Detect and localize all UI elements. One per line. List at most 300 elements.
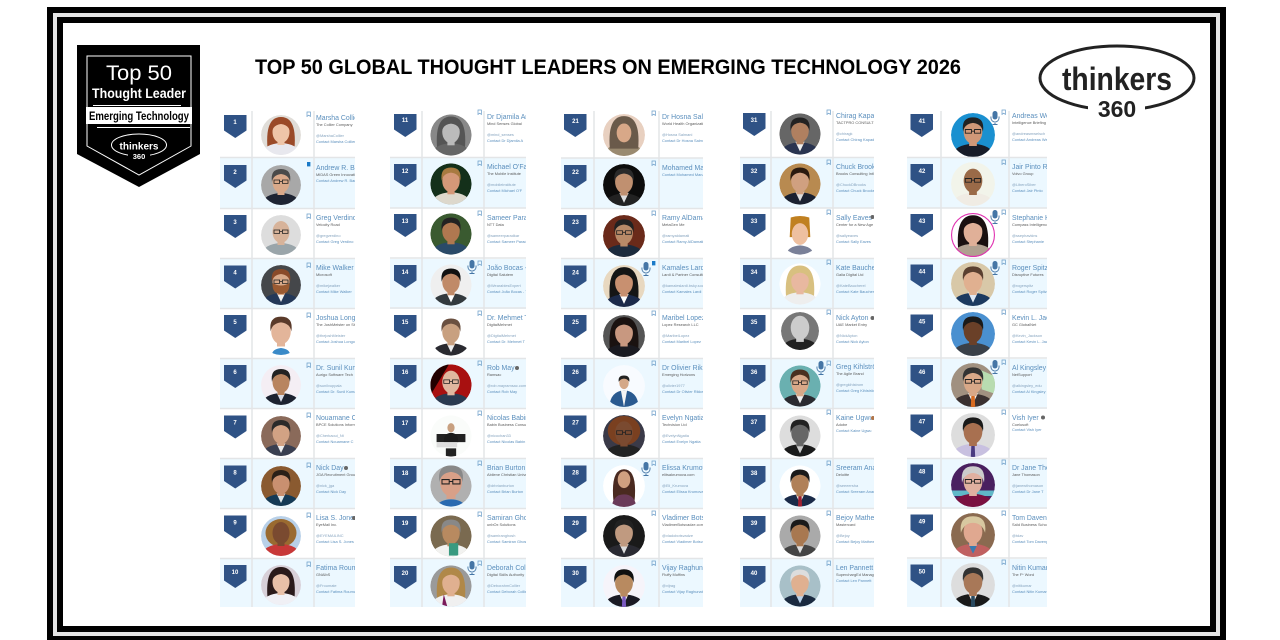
row 14 — [390, 259, 541, 309]
details 36 — [836, 364, 882, 393]
row 26 — [561, 359, 714, 409]
details 1: Contact Marsha Collier — [316, 139, 356, 144]
portrait 7 — [261, 416, 301, 458]
badge: Top 50 Thought Leader Emerging Technology: Top 50 — [106, 62, 172, 85]
details 48: Contact Dr Jane T — [1012, 489, 1044, 494]
row 24: 24 — [572, 270, 579, 276]
details 17: @nicochan33 — [487, 433, 511, 438]
details 6: Dr. Sunil Kumar — [316, 365, 365, 372]
row 8: 8 — [233, 470, 237, 476]
details 41 — [1012, 113, 1062, 142]
row 37 — [743, 410, 875, 459]
portrait 12 — [430, 163, 472, 207]
details 7: BPCE Solutions Informatiques — [316, 422, 368, 427]
details 9: Lisa S. Jones — [316, 515, 358, 522]
details 26: Dr Olivier Rikken — [662, 365, 714, 372]
portrait 20 — [430, 565, 472, 609]
details 18: Brian Burton — [487, 465, 525, 472]
details 42: @LiberoSiber — [1012, 182, 1037, 187]
details 4 — [316, 265, 354, 294]
details 41: Contact Andreas Welsch — [1012, 137, 1055, 142]
details 16: Contact Rob May — [487, 389, 517, 394]
details 36: The Agile Brand — [836, 371, 864, 376]
row 6 — [220, 359, 365, 409]
details 44: @rogerspitz — [1012, 283, 1033, 288]
details 13 — [487, 215, 542, 244]
row 16: 16 — [402, 370, 409, 376]
details 16 — [487, 365, 526, 394]
row 39: 39 — [751, 521, 758, 527]
portrait 27 — [603, 415, 645, 459]
portrait 48 — [951, 463, 995, 509]
portrait 32 — [779, 163, 821, 207]
details 1: The Collier Company — [316, 122, 353, 127]
details 46 — [1012, 365, 1047, 394]
details 47 — [1012, 415, 1045, 432]
details 45: Contact Kevin L. Jackson — [1012, 339, 1056, 344]
portrait 49 — [951, 513, 995, 559]
row 44 — [907, 259, 1049, 309]
details 12 — [487, 164, 526, 192]
row 31 — [743, 110, 884, 157]
details 35: Nick Ayton — [836, 315, 869, 322]
portrait 1 — [261, 115, 301, 157]
details 46: @alkingsley_edu — [1012, 383, 1042, 388]
details 40 — [836, 565, 886, 583]
details 9: EyeMail Inc. — [316, 522, 337, 527]
logo: thinkers 360: thinkers — [1062, 61, 1172, 97]
portrait 22 — [603, 164, 645, 208]
details 11: Dr Djamila Amimer — [487, 114, 545, 121]
row 17 — [394, 411, 533, 457]
row 50 — [907, 559, 1049, 609]
panel: ranks 1-10 — [220, 111, 355, 607]
row 36 — [740, 359, 882, 409]
row 47: 47 — [919, 420, 926, 426]
row 20: 20 — [402, 571, 409, 577]
details 42: Contact Jair Pinto — [1012, 188, 1043, 193]
details 27: Evelyn Ngatia — [662, 415, 705, 422]
row 13 — [394, 210, 526, 255]
details 23: @ramyaldamati — [662, 233, 689, 238]
details 20: Deborah Collier — [487, 565, 536, 572]
panel: ranks 21-30 — [561, 111, 723, 609]
row 49: 49 — [919, 520, 926, 526]
portrait 41 — [951, 113, 995, 159]
portrait 3 — [261, 215, 301, 257]
details 30: Vijay Raghunathan — [662, 565, 720, 572]
row 21: 21 — [572, 119, 579, 125]
row 44: 44 — [919, 270, 926, 276]
details 21: @Hosna Salmani — [662, 132, 692, 137]
row 12 — [390, 158, 539, 208]
details 25: Lopez Research LLC — [662, 322, 699, 327]
details 28 — [662, 465, 710, 494]
details 42 — [1012, 164, 1065, 193]
portrait 29 — [603, 515, 645, 559]
details 39 — [836, 515, 879, 544]
row 23 — [564, 211, 710, 259]
details 17: Nicolas Babin — [487, 415, 529, 422]
badge: Top 50 Thought Leader Emerging Technology: thinkers — [120, 140, 159, 152]
details 46: Contact Al Kingsley — [1012, 389, 1046, 394]
details 16: @rob.mayramsac.com — [487, 383, 526, 388]
row 5 — [224, 313, 360, 355]
details 34: Contact Kate Baucherel — [836, 289, 877, 294]
row 3: 3 — [233, 220, 237, 226]
details 50 — [1012, 565, 1049, 594]
details 39: @Bejoy — [836, 533, 850, 538]
details 41: Intelligence Briefing — [1012, 120, 1046, 125]
details 38: Contact Sreeram Anantha — [836, 489, 882, 494]
details 20 — [487, 565, 536, 594]
portrait 30 — [603, 565, 645, 609]
details 7 — [316, 415, 355, 443]
details 18: Abilene Christian University — [487, 472, 535, 477]
row 46: 46 — [919, 370, 926, 376]
row 15: 15 — [402, 320, 409, 326]
portrait 35 — [781, 312, 819, 352]
row 23: 23 — [572, 220, 579, 226]
row 49 — [910, 511, 1059, 559]
row 30 — [561, 559, 720, 609]
details 12: Michael O'Farrell — [487, 164, 539, 171]
details 13: Sameer Paradkar — [487, 215, 542, 222]
badge: Top 50 Thought Leader Emerging Technology: Emerging Technology — [89, 111, 189, 123]
details 8: Nick Day — [316, 465, 344, 472]
details 42: Jair Pinto Ribeiro — [1012, 164, 1065, 171]
details 2: Andrew R. Bauer — [316, 165, 369, 172]
details 34: Kate Baucherel — [836, 265, 884, 272]
details 45: Kevin L. Jackson — [1012, 315, 1064, 322]
portrait 5 — [270, 316, 292, 355]
details 17 — [487, 415, 533, 444]
details 46: NetSupport — [1012, 372, 1033, 377]
details 22 — [662, 165, 714, 177]
details 32: Contact Chuck Brooks — [836, 188, 875, 193]
details 49: Contact Tom Davenport — [1012, 539, 1054, 544]
portrait 37 — [779, 415, 821, 459]
details 28: elitsakrumova.com — [662, 472, 694, 477]
portrait 18 — [430, 465, 472, 509]
details 33: @sallyeaves — [836, 233, 858, 238]
details 47: Vish Iyer — [1012, 415, 1039, 422]
badge: Top 50 Thought Leader Emerging Technology — [77, 45, 200, 187]
details 2: Contact Andrew R. Bauer — [316, 178, 361, 183]
details 11: Contact Dr Djamila A — [487, 138, 524, 143]
details 3: Velocity Road — [316, 222, 340, 227]
title: TOP 50 GLOBAL THOUGHT LEADERS ON EMERGING TECHNOLOGY 2026 — [255, 56, 961, 79]
logo: thinkers 360 — [1040, 46, 1194, 122]
details 40: SuperchargEd Management — [836, 572, 886, 577]
details 42: Volvo Group — [1012, 171, 1033, 176]
row 48 — [907, 459, 1071, 509]
portrait 15 — [430, 314, 472, 358]
row 5: 5 — [233, 320, 237, 326]
details 5 — [316, 314, 355, 344]
portrait 43 — [951, 213, 995, 259]
details 31: TACTPRO CONSULTING — [836, 120, 881, 125]
details 36: @gregkihlstrom — [836, 382, 863, 387]
row 32 — [740, 158, 879, 208]
row 29 — [564, 511, 723, 559]
details 3: @gregverdino — [316, 233, 340, 238]
details 43: Compass Intelligence — [1012, 222, 1049, 227]
details 30: Fluffy Muffins — [662, 572, 685, 577]
details 12: Contact Michael O'F — [487, 188, 523, 193]
row 26: 26 — [572, 370, 579, 376]
details 22: Contact Mohamed Manaf — [662, 172, 707, 177]
details 5: @thejoshMeister — [316, 333, 346, 338]
details 15: DigitalMehmet — [487, 322, 513, 327]
details 10: GNAIbS — [316, 572, 331, 577]
details 14 — [487, 265, 541, 294]
details 46: Al Kingsley — [1012, 365, 1047, 372]
portrait 26 — [603, 365, 645, 407]
details 3 — [316, 215, 357, 244]
row 28 — [561, 459, 710, 509]
details 25: @MaribelLopez — [662, 333, 689, 338]
details 26: Contact Dr Olivier Rikken — [662, 389, 706, 394]
details 43 — [1012, 215, 1070, 244]
details 19: Contact Samiran Ghosh — [487, 539, 529, 544]
portrait 9 — [261, 516, 301, 558]
row 48: 48 — [919, 470, 926, 476]
details 15: Dr. Mehmet Toner — [487, 315, 542, 322]
details 50: The F* Word — [1012, 572, 1034, 577]
details 19: @samiranghosh — [487, 533, 515, 538]
row 33 — [743, 210, 874, 257]
details 10: Contact Fatima Roumate — [316, 589, 359, 594]
details 44: Roger Spitz — [1012, 265, 1049, 272]
row 41 — [910, 110, 1062, 159]
details 23: Ramy AlDamati — [662, 215, 710, 222]
details 16: Ramsac — [487, 372, 501, 377]
details 40: Contact Len Pannett — [836, 578, 872, 583]
details 36: Contact Greg Kihlström — [836, 388, 876, 393]
details 15 — [487, 315, 542, 344]
details 3: Contact Greg Verdino — [316, 239, 353, 244]
details 9: @EYEMAILINC — [316, 533, 344, 538]
row 41: 41 — [919, 119, 926, 125]
details 31: @chiragk — [836, 131, 853, 136]
row 29: 29 — [572, 521, 579, 527]
portrait 4 — [261, 265, 301, 307]
details 32: Chuck Brooks — [836, 164, 879, 171]
row 15 — [394, 311, 542, 358]
details 30: Contact Vijay Raghunathan — [662, 589, 709, 594]
row 4 — [220, 259, 355, 309]
portrait 46 — [951, 363, 995, 409]
details 36: Greg Kihlström — [836, 364, 882, 371]
portrait 50 — [951, 563, 995, 609]
details 37: Kaine Ugwu — [836, 415, 873, 422]
details 39: Contact Bejoy Mathew — [836, 539, 875, 544]
details 9 — [316, 515, 358, 544]
details 29: Vladimer Botsvadze — [662, 515, 723, 522]
details 27: Techvision Ltd — [662, 422, 687, 427]
details 11: Mind Senses Global — [487, 121, 522, 126]
details 20: @DeborahmCollier — [487, 583, 521, 588]
row 45 — [910, 310, 1064, 358]
details 43: Stephanie Hopkins — [1012, 215, 1070, 222]
details 44 — [1012, 265, 1049, 294]
details 35: @NickAyton — [836, 333, 857, 338]
details 23: MetaGen Me — [662, 222, 684, 227]
row 10: 10 — [232, 570, 239, 576]
details 40: Len Pannett — [836, 565, 873, 572]
details 49: Saïd Business School — [1012, 522, 1050, 527]
details 18: Contact Brian Burton — [487, 489, 523, 494]
row 4: 4 — [233, 270, 237, 276]
row 39 — [743, 511, 879, 559]
portrait 47 — [951, 413, 995, 459]
row 38 — [740, 459, 890, 509]
details 20: Digital Skills Authority — [487, 572, 524, 577]
details 10: @Froumate — [316, 583, 337, 588]
row 27: 27 — [572, 420, 579, 426]
details 48: Dr Jane Thomason — [1012, 465, 1071, 472]
details 5: Contact Joshua Longo — [316, 339, 355, 344]
row 24 — [561, 259, 708, 309]
portrait 13 — [430, 213, 472, 257]
details 26: @olivier1977 — [662, 383, 685, 388]
portrait 31 — [779, 113, 821, 157]
details 13: NTT Data — [487, 222, 505, 227]
row 1: 1 — [233, 120, 237, 126]
details 2 — [316, 164, 355, 182]
row 12: 12 — [402, 169, 409, 175]
row 18 — [390, 459, 535, 509]
details 28: Elissa Krumova — [662, 465, 710, 472]
details 6: Contact Dr. Sunil Kumar — [316, 389, 358, 394]
row 16 — [390, 359, 526, 409]
details 43: Contact Stephanie — [1012, 239, 1044, 244]
details 6: Aurigo Software Tech — [316, 372, 353, 377]
details 2: MIDAS Green Innovation — [316, 172, 359, 177]
details 22: Mohamed Manaf — [662, 165, 714, 172]
row 10 — [220, 559, 367, 607]
row 7 — [224, 412, 355, 456]
details 39: Mastercard — [836, 522, 855, 527]
details 41: Andreas Welsch — [1012, 113, 1062, 120]
details 27: Contact Evelyn Ngatia — [662, 439, 701, 444]
details 13: @sameerparadkar — [487, 233, 520, 238]
details 14: @WearablesExpert — [487, 283, 522, 288]
row 19: 19 — [402, 521, 409, 527]
details 45: GC GlobalNet — [1012, 322, 1037, 327]
details 50: Contact Nitin Kumar — [1012, 589, 1048, 594]
row 17: 17 — [402, 421, 409, 427]
details 31 — [836, 113, 884, 142]
portrait 25 — [603, 315, 645, 359]
details 34: Galia Digital Ltd — [836, 272, 863, 277]
row 11 — [394, 110, 526, 156]
row 36: 36 — [751, 370, 758, 376]
details 27: @EvelynNgatia — [662, 433, 690, 438]
details 29: Contact Vladimer Botsvadze — [662, 539, 711, 544]
details 21: Dr Hosna Salmani — [662, 114, 718, 121]
portrait 19 — [430, 515, 472, 559]
details 48: @janewthomason — [1012, 483, 1043, 488]
details 21: World Health Organization — [662, 121, 708, 126]
details 35: Contact Nick Ayton — [836, 339, 869, 344]
portrait 17 — [430, 415, 472, 457]
row 8 — [220, 459, 357, 509]
row 43 — [910, 210, 1070, 259]
portrait 38 — [779, 465, 821, 509]
row 14: 14 — [402, 270, 409, 276]
details 9: Contact Lisa S. Jones — [316, 539, 354, 544]
row 2 — [220, 158, 369, 208]
details 37: Adobe — [836, 422, 847, 427]
details 34 — [836, 265, 884, 294]
details 25 — [662, 315, 706, 344]
portrait 36 — [779, 365, 821, 409]
details 28: Contact Elissa Krumova — [662, 489, 704, 494]
details 28: @Eli_Krumova — [662, 483, 689, 488]
portrait 8 — [261, 466, 301, 508]
details 47: Coelusoft — [1012, 422, 1029, 427]
details 25: Contact Maribel Lopez — [662, 339, 701, 344]
details 6: @sunilvuppala — [316, 383, 342, 388]
details 49 — [1012, 515, 1059, 544]
details 39: Bejoy Mathew — [836, 515, 879, 522]
details 50: Nitin Kumar — [1012, 565, 1049, 572]
portrait 45 — [951, 312, 995, 358]
row 9: 9 — [233, 520, 237, 526]
details 4: Contact Mike Walker — [316, 289, 352, 294]
portrait 14 — [430, 264, 472, 308]
row 40: 40 — [751, 571, 758, 577]
row 13: 13 — [402, 219, 409, 225]
portrait 42 — [951, 162, 995, 208]
details 23: Contact Ramy AlDamati — [662, 239, 703, 244]
row 46 — [907, 359, 1047, 409]
details 17: Babin Business Consulting — [487, 422, 533, 427]
portrait 21 — [603, 114, 645, 158]
details 33: Contact Sally Eaves — [836, 239, 871, 244]
details 49: Tom Davenport — [1012, 515, 1059, 522]
row 34 — [740, 259, 884, 309]
portrait 33 — [779, 213, 821, 257]
details 19 — [487, 515, 535, 544]
details 15: @DigitalMehmet — [487, 333, 517, 338]
panel: ranks 41-50 — [907, 110, 1071, 609]
details 4: Microsoft — [316, 272, 333, 277]
details 29: VladimerBotsvadze.com — [662, 522, 704, 527]
details 29: @vladobotsvadze — [662, 533, 693, 538]
details 10 — [316, 564, 355, 593]
details 31: Chirag Kapadia — [836, 113, 884, 120]
row 50: 50 — [919, 570, 926, 576]
row 47 — [910, 410, 1045, 459]
details 29 — [662, 515, 723, 544]
details 14: Contact João Bocas - The — [487, 289, 532, 294]
details 24: Kamales Lardi — [662, 265, 707, 272]
row 7: 7 — [233, 420, 237, 426]
details 1 — [316, 114, 355, 143]
details 15: Contact Dr. Mehmet T — [487, 339, 526, 344]
row 45: 45 — [919, 320, 926, 326]
row 27 — [564, 411, 705, 459]
row 21 — [564, 111, 718, 158]
portrait 11 — [430, 114, 472, 158]
details 21 — [662, 114, 718, 143]
row 3 — [224, 214, 357, 257]
details 33: Sally Eaves — [836, 215, 873, 222]
details 1: @MarshaCollier — [316, 133, 345, 138]
